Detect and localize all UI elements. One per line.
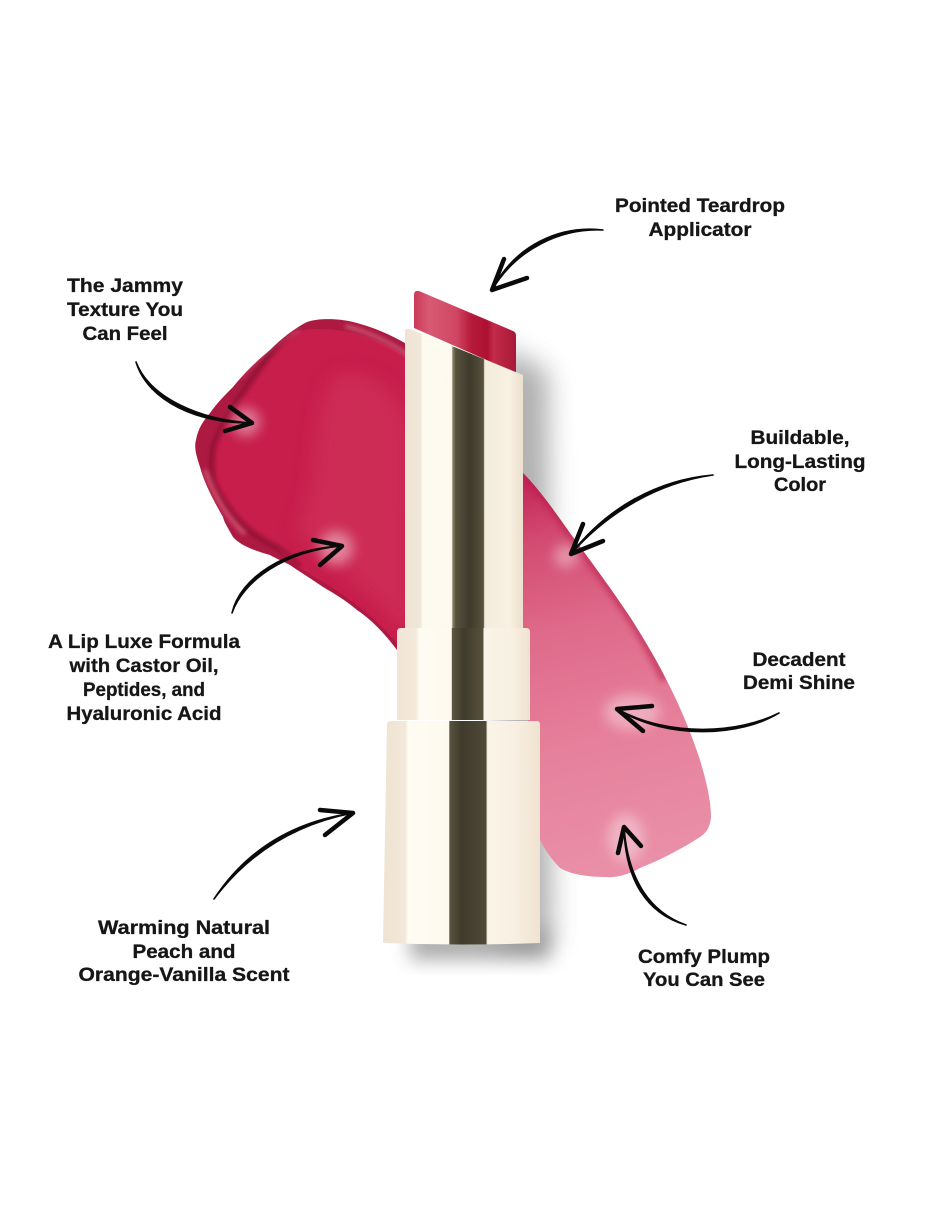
callout: jammy texture: The Jammy [67,276,183,297]
arrow: warming scent [214,810,353,899]
callout: long-lasting color: Color [774,475,827,496]
lipstick middle collar [397,628,530,720]
callout: demi shine [743,650,855,694]
callout: pointed teardrop applicator [615,196,785,241]
arrow: comfy plump [618,827,686,925]
callout: lip luxe formula: Peptides, and [83,680,205,701]
arrow: demi shine [617,706,779,732]
callout: demi shine: Demi Shine [743,673,855,694]
lipstick upper tube [405,329,523,628]
swatch: sheer pink lower smear [515,465,715,885]
callout: warming scent: Orange-Vanilla Scent [78,965,290,986]
callout: comfy plump: You Can See [643,970,765,991]
callout: demi shine: Decadent [752,650,846,671]
lipstick base [383,721,540,944]
soft highlights behind arrow tips [232,408,660,862]
callout: warming scent [78,918,290,986]
swatch: deep red upper smear [195,319,405,650]
callout: comfy plump: Comfy Plump [638,947,770,968]
callout: warming scent: Peach and [132,942,236,963]
callout: pointed teardrop applicator: Pointed Teardrop [615,196,785,217]
callout: long-lasting color: Long-Lasting [734,452,866,473]
callout: warming scent: Warming Natural [98,918,270,939]
callout: lip luxe formula [48,632,240,725]
callout: lip luxe formula: A Lip Luxe Formula [48,632,240,653]
callout: pointed teardrop applicator: Applicator [648,220,752,241]
arrow: jammy texture [136,362,252,431]
callout: comfy plump [638,947,770,991]
lipstick [383,291,540,944]
callout: lip luxe formula: Hyaluronic Acid [66,704,222,725]
arrow: applicator [492,229,603,290]
callout: long-lasting color [734,428,866,496]
callout: jammy texture: Can Feel [82,324,168,345]
callout: jammy texture: Texture You [67,300,183,321]
arrow: long-lasting color [571,475,713,554]
arrow: lip luxe formula [232,540,342,613]
tube cast shadow [410,345,552,960]
callout: long-lasting color: Buildable, [750,428,850,449]
callout: jammy texture [67,276,183,345]
lipstick bullet [414,291,516,373]
callout: lip luxe formula: with Castor Oil, [68,656,219,677]
